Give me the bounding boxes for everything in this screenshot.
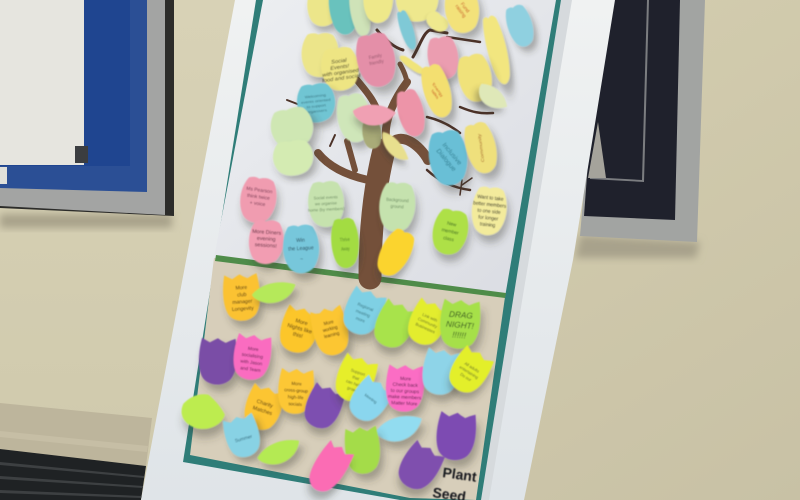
tulip: orange social: More (291, 381, 302, 387)
text: Plant a Seed title (432, 464, 478, 500)
leaf note: blue awareness: Welcoming (304, 93, 326, 99)
right framed picture (575, 0, 705, 258)
tulip: yellow-green (402, 297, 452, 350)
tulip: pink: socialising (241, 352, 264, 360)
tulip: orange more working: learning (323, 330, 340, 339)
tulip: pink: with Jason (240, 358, 263, 366)
leaf note: folded yellow orange-writing (417, 62, 457, 120)
leaf note: orange-written yellow (442, 0, 482, 35)
tree (287, 30, 493, 278)
note: yellow at trunk (371, 225, 419, 281)
paper: sky area (214, 0, 556, 297)
tulip: purple low (392, 439, 447, 496)
leaf note: yellow fold strip (398, 54, 426, 77)
leaf note: pale green left (267, 104, 317, 152)
tulip: orange more nights (275, 304, 323, 357)
leaf note: pale green fold (475, 78, 508, 115)
tulip: drag night (438, 299, 482, 350)
tulip: blue right (419, 347, 463, 398)
note: pink more diners: More Diners (252, 229, 282, 237)
tulip: drag night: NIGHT! (446, 320, 475, 331)
tulip: purple right (434, 411, 478, 462)
leaf note: top pale green (347, 0, 374, 37)
tulip: yellow right: Do our (459, 372, 473, 383)
tulip: yellow right: entertaining (459, 364, 480, 380)
tulip: pink: and Team (240, 365, 261, 373)
tulip: yellow: grow (347, 385, 358, 393)
half note: green left (178, 390, 228, 433)
note: pale yellow training: better members (473, 200, 507, 210)
leaf note: yellow with green writing (302, 33, 339, 77)
tulip: orange social: high-life (288, 394, 304, 400)
twigs (287, 30, 493, 195)
leaf note: top teal (326, 0, 360, 36)
note: pink more diners: sessions! (254, 242, 277, 250)
tulip: orange more club: club (237, 292, 247, 299)
tulip: yellow: Support (350, 367, 366, 377)
leaf note: blue awareness (295, 82, 337, 124)
leaf note: blue fold (395, 9, 419, 51)
note: pale green right of trunk (378, 181, 417, 233)
tulip: pink check back: More (400, 376, 411, 383)
note: pink Mr Pearson: + voice (249, 200, 266, 208)
leaf note: pink upper: Family (368, 52, 383, 61)
tulip: yellow right (443, 344, 496, 399)
tulip: blue sky: meeting (355, 308, 371, 319)
note: pale yellow training: to one side (477, 207, 501, 216)
note: green new member: member (441, 227, 460, 237)
note: pale green left of trunk: Social events (313, 194, 338, 201)
leaf note: inclusive blue: Dialogue (435, 147, 457, 173)
leaf note: olive behind centre (361, 118, 384, 150)
leaf note: orange-written yellow: raising (454, 4, 467, 19)
teal inner border (183, 0, 561, 500)
leaf note: social events: with organised (322, 68, 360, 79)
tulip: pink (231, 333, 273, 382)
tulip: yellow (330, 352, 380, 407)
tulip: blue low left: Summer (234, 434, 253, 443)
tulip: orange march (240, 382, 286, 434)
leaf note: light blue right (502, 2, 538, 50)
note: pale green right of trunk: ground (390, 203, 404, 209)
note: pale green left of trunk: home (by members) (308, 206, 345, 213)
leaf note: folded yellow orange-writing: Energy (432, 81, 444, 99)
note: pink Mr Pearson: think twice (247, 193, 270, 202)
tulip: blue sky: Regional (357, 301, 374, 312)
note: pink Mr Pearson: Ms Pearson (246, 186, 273, 195)
tulip: pink check back: Check back (392, 382, 419, 389)
tulip: pink check back: make members (388, 394, 422, 402)
note: pale yellow training: training (479, 221, 496, 229)
note: pale yellow training: Want to take (477, 194, 504, 203)
leaf note: pale green centre (334, 91, 375, 145)
note: pink Mr Pearson (237, 175, 279, 225)
note: pale green left of trunk: we organise (315, 200, 338, 206)
tulip: yellow right: All adults (464, 361, 480, 374)
note: pale green right of trunk: Background (386, 197, 409, 203)
leaf note: top yellow 3 (396, 0, 438, 22)
note: pink more diners (247, 219, 285, 265)
leaf note: inclusive blue: Inclusive (441, 141, 463, 167)
note: pale yellow training: for longer (478, 214, 499, 223)
folded leaf: blue low (375, 414, 422, 443)
tulip: yellow-green: Link with (422, 312, 439, 323)
leaf note: social events: Social (331, 58, 348, 66)
leaf note: inclusive blue (426, 128, 471, 188)
tulip: purple middle (299, 381, 347, 433)
tulip: orange more nights: Nights like (286, 323, 313, 336)
leaf note: blue awareness: organisers (307, 108, 327, 114)
tulip: yellow: that (352, 374, 361, 382)
note: green at trunk: Away (341, 245, 351, 252)
paper: soil area (190, 258, 505, 500)
tulip: orange more nights: More (295, 318, 308, 327)
tulip: pink: More (248, 346, 259, 352)
tulip: pink check back (385, 364, 425, 413)
leaf note: top yellow (307, 0, 339, 26)
leaf note: pink right (425, 35, 461, 81)
leaf note: pink upper: friendly (369, 58, 385, 67)
leaf note: yellow right 2 (454, 52, 496, 105)
trunk (370, 150, 384, 278)
note: green at trunk (330, 217, 361, 269)
tulip: pink check back: Matter More (391, 400, 418, 408)
leaf note: yellow community (460, 120, 502, 176)
tulip: blue low left (221, 412, 265, 461)
tulip: orange more club: manager (232, 298, 253, 306)
leaf note: pink centre (393, 87, 429, 139)
tulip: orange more club (222, 273, 262, 322)
leaf note: social events (318, 45, 363, 93)
note: green at trunk: Thrive (340, 236, 350, 243)
leaf note: blue awareness: to support (307, 103, 327, 109)
text: Plant a Seed title: Plant (442, 464, 478, 485)
tulip: orange march: Matches (252, 405, 273, 417)
leaf notes on tree (178, 0, 538, 500)
tulip: orange more working: working (322, 324, 339, 333)
tulip: orange march: Charity (256, 399, 274, 410)
tulip: pink check back: to our groups (391, 388, 420, 395)
leaf note: folded yellow orange-writing: talks (431, 88, 440, 101)
white board frame (141, 0, 615, 500)
leaf note: pink upper (352, 30, 400, 90)
leaf note: social events: food and social (322, 73, 362, 84)
leaf note: top yellow 2 (363, 0, 393, 23)
leaf note: yellow community: Community (477, 133, 486, 162)
tulip: orange social: socials (288, 401, 303, 407)
note: blue win the league: ~ (300, 256, 303, 263)
tulip: yellow: can help (345, 378, 363, 389)
tulip: drag night: !!!!!! (452, 330, 467, 340)
note: green new member (429, 206, 472, 258)
note: blue win the league: Win (296, 237, 305, 244)
tulip: green (368, 298, 420, 353)
frame inner bevel (478, 0, 572, 500)
leaf note: pale yellow folded (379, 127, 409, 166)
tulip: purple left (198, 338, 238, 385)
tulip: orange more working: More (323, 319, 335, 326)
tulip: orange more club: Longevity (232, 305, 254, 313)
note: pink more diners: evening (257, 236, 276, 243)
leaf note: blue awareness: events oriented (301, 97, 331, 105)
leaf note: orange-written yellow: Fund (459, 1, 470, 14)
tulip: orange more club: More (235, 285, 247, 292)
tulip: orange social (277, 368, 315, 415)
tulip: yellow-green: Businesses (415, 321, 436, 334)
note: blue win the league (282, 224, 320, 274)
tulip: pink low (303, 439, 356, 498)
grass line (215, 255, 506, 298)
note: pale green left of trunk (307, 180, 346, 228)
tulip: blue sky: more (355, 315, 366, 324)
note: green new member: New (446, 220, 457, 229)
wall rail and radiator vent (0, 403, 152, 500)
leaf note: pink folded (350, 96, 396, 133)
tulip: orange more working (308, 304, 353, 359)
note: blue win the league: the League (288, 245, 314, 253)
folded leaf: green low (256, 439, 301, 465)
leaf note: yellow strip (423, 9, 451, 36)
tulip: green low (343, 426, 382, 475)
leaf note: social events: Events! (330, 63, 350, 72)
leaf note: yellow strip right (479, 14, 515, 86)
tulip: orange social: cross-group (284, 387, 309, 394)
leaf note: pale green lower left (271, 139, 315, 177)
tulip: drag night: DRAG (449, 310, 474, 321)
note: pale yellow training (469, 185, 509, 237)
tulip: blue sky (338, 285, 388, 340)
left framed picture (0, 0, 174, 228)
tulip: blue centre (343, 373, 395, 428)
folded leaf: green top (251, 280, 296, 305)
main branches (318, 64, 428, 180)
note: green new member: class (443, 235, 455, 243)
tulip: orange more nights: this! (292, 331, 304, 340)
tulip: blue centre: Meeting (364, 392, 378, 405)
tulip: yellow-green: Community (417, 316, 439, 330)
